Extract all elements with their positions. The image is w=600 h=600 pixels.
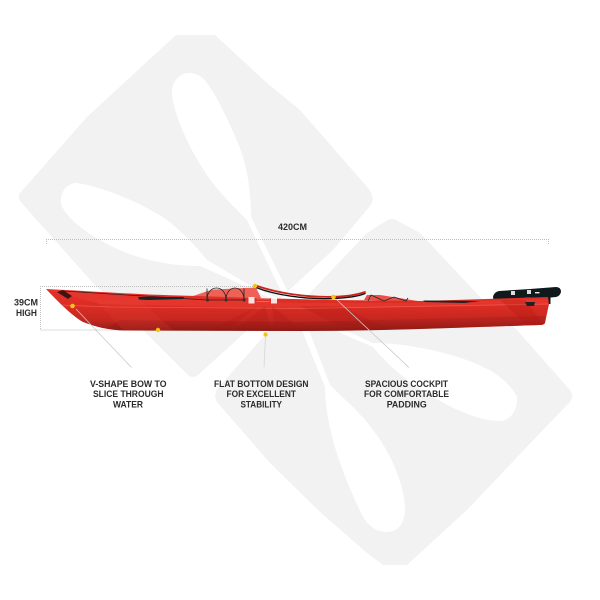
callout: v-shape bow bbox=[70, 304, 166, 409]
watermark: upper-left lobe bbox=[18, 35, 373, 377]
length label: 420CM bbox=[278, 222, 307, 232]
callout text: bow: V-SHAPE BOW TO bbox=[90, 379, 166, 389]
callout text: flat bottom: FOR EXCELLENT bbox=[226, 389, 296, 399]
kayak: hull bbox=[46, 289, 549, 331]
kayak: pink deck forward bbox=[190, 288, 262, 300]
callout: flat bottom bbox=[214, 332, 308, 409]
watermark: paddle one bbox=[172, 73, 405, 532]
length dotted rule bbox=[46, 240, 548, 244]
leader line: cockpit bbox=[336, 299, 409, 368]
kayak: cockpit rim bbox=[256, 286, 365, 299]
callout text: bow: SLICE THROUGH bbox=[93, 389, 164, 399]
height label: 39CM bbox=[14, 298, 38, 308]
callout text: flat bottom: STABILITY bbox=[240, 399, 282, 409]
kayak: aft hatch bbox=[423, 300, 480, 303]
marker dot: cockpit front bbox=[253, 284, 257, 288]
callout text: cockpit: SPACIOUS COCKPIT bbox=[365, 379, 448, 389]
kayak: forward deck line bbox=[64, 291, 244, 300]
callout dot: cockpit bbox=[331, 295, 336, 299]
kayak: forward bungee cords bbox=[207, 288, 244, 300]
kayak bbox=[46, 286, 561, 332]
marker dot: hull bottom bbox=[156, 328, 160, 332]
callout text: cockpit: FOR COMFORTABLE bbox=[364, 389, 449, 399]
kayak: stern cleat bbox=[525, 302, 535, 306]
kayak: deck fittings bbox=[206, 298, 246, 302]
watermark: paddle two bbox=[61, 183, 517, 421]
dimension: height 39cm bbox=[14, 286, 255, 330]
kayak: hull shading bbox=[61, 300, 548, 331]
callout text: flat bottom: FLAT BOTTOM DESIGN bbox=[214, 379, 308, 389]
kayak: rudder bbox=[493, 287, 561, 304]
kayak: pink deck aft bbox=[364, 295, 424, 302]
leader line: flat bottom bbox=[264, 337, 266, 368]
leader line: bow bbox=[76, 309, 132, 368]
height dotted bracket bbox=[40, 286, 255, 330]
callout: spacious cockpit bbox=[331, 295, 449, 409]
kayak: forward hatch bbox=[138, 297, 184, 300]
callout text: bow: WATER bbox=[113, 399, 143, 409]
kayak: logo marks bbox=[248, 297, 277, 304]
callout dot: flat bottom bbox=[263, 332, 268, 337]
callout dot: bow bbox=[70, 304, 75, 308]
kayak: bow hatch detail bbox=[57, 290, 72, 299]
watermark: lower-right lobe bbox=[215, 219, 572, 565]
kayak: aft bungee cords bbox=[368, 295, 408, 301]
height label: HIGH bbox=[16, 308, 37, 318]
dimension: overall length 420cm bbox=[46, 222, 548, 244]
callout text: cockpit: PADDING bbox=[387, 399, 427, 409]
